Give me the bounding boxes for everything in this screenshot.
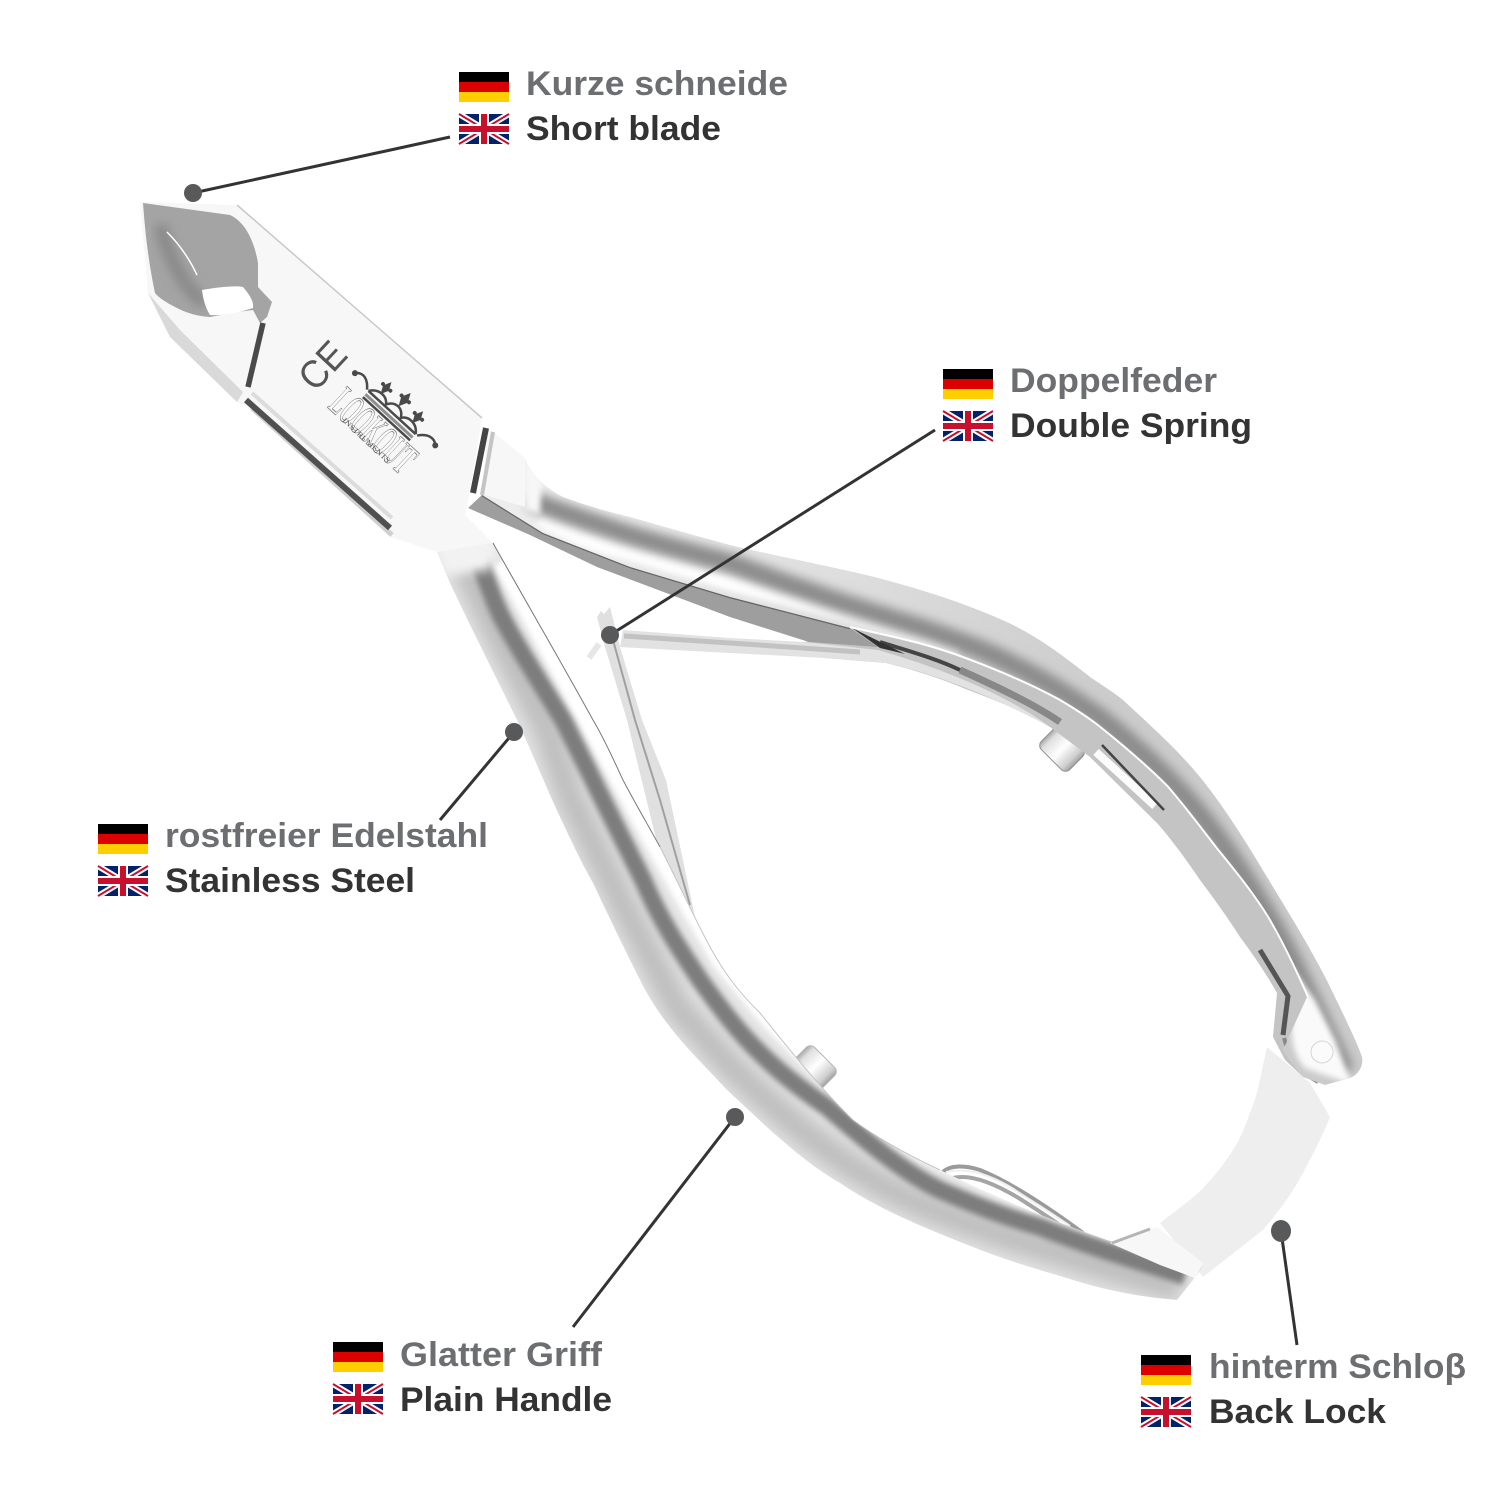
- flag: Germany: [459, 72, 509, 102]
- flag: Germany: [943, 369, 993, 399]
- leader line: [573, 1108, 744, 1327]
- plain lower handle: [437, 543, 1202, 1300]
- coiled wire spring: [943, 1166, 1083, 1233]
- jaw head plate: [140, 202, 493, 552]
- flag: UK: [459, 114, 509, 144]
- jaw lower bevel: [148, 293, 243, 402]
- German label: Kurze schneide: [526, 65, 788, 103]
- dark spring notch: [852, 628, 905, 654]
- head-to-handle slit: [473, 428, 486, 493]
- spring slots: [880, 642, 1318, 1082]
- LOOKOUT wordmark: LOOKOUT: [320, 378, 427, 483]
- spring leaf vertical: [597, 607, 695, 917]
- callout: stainless steel: [98, 723, 523, 900]
- German label: Doppelfeder: [1010, 362, 1217, 400]
- upper handle: [460, 420, 1380, 1100]
- leader line: [440, 723, 523, 820]
- handle inner edge line: [493, 543, 660, 847]
- wedge bevel under upper handle: [468, 495, 878, 647]
- flag: UK: [943, 411, 993, 441]
- CE mark: CE: [290, 333, 356, 399]
- INSTRUMENTS wordmark: INSTRUMENTS: [341, 416, 392, 465]
- spring leaf horizontal: [620, 630, 1050, 727]
- German label: Glatter Griff: [400, 1336, 603, 1374]
- flag: Germany: [1141, 1355, 1191, 1385]
- flag: Germany: [333, 1342, 383, 1372]
- German label: rostfreier Edelstahl: [165, 817, 488, 855]
- callout: short blade: [184, 65, 788, 202]
- nail nipper tool: [140, 202, 1380, 1320]
- blade highlight: [167, 232, 197, 275]
- callout: plain handle: [333, 1108, 744, 1419]
- spring stub: [589, 644, 599, 658]
- German label: hinterm Schloβ: [1209, 1348, 1466, 1386]
- English label: Plain Handle: [400, 1381, 612, 1419]
- lower pivot bolt: [789, 1043, 839, 1093]
- lower handle tip mount: [1110, 1227, 1203, 1278]
- English label: Short blade: [526, 110, 721, 148]
- English label: Stainless Steel: [165, 862, 415, 900]
- English label: Double Spring: [1010, 407, 1252, 445]
- leader line: [184, 137, 450, 202]
- flag: UK: [1141, 1397, 1191, 1427]
- callout: double spring: [601, 362, 1252, 644]
- crown logo: [344, 354, 452, 458]
- rear pivot pin: [1311, 1041, 1333, 1063]
- flag: UK: [98, 866, 148, 896]
- callout: back lock: [1141, 1220, 1466, 1431]
- cavity opening: [202, 286, 253, 315]
- leader line: [601, 430, 935, 644]
- lower joint groove: [246, 400, 390, 528]
- flag: UK: [333, 1384, 383, 1414]
- back lock plate: [1160, 1047, 1330, 1277]
- blade joint slit: [248, 323, 263, 387]
- double spring inner band: [805, 628, 1307, 1077]
- leader line: [1271, 1220, 1297, 1345]
- flag: Germany: [98, 824, 148, 854]
- English label: Back Lock: [1209, 1393, 1386, 1431]
- cutting edge cavity: [143, 203, 272, 323]
- upper pivot bolt: [1037, 724, 1087, 774]
